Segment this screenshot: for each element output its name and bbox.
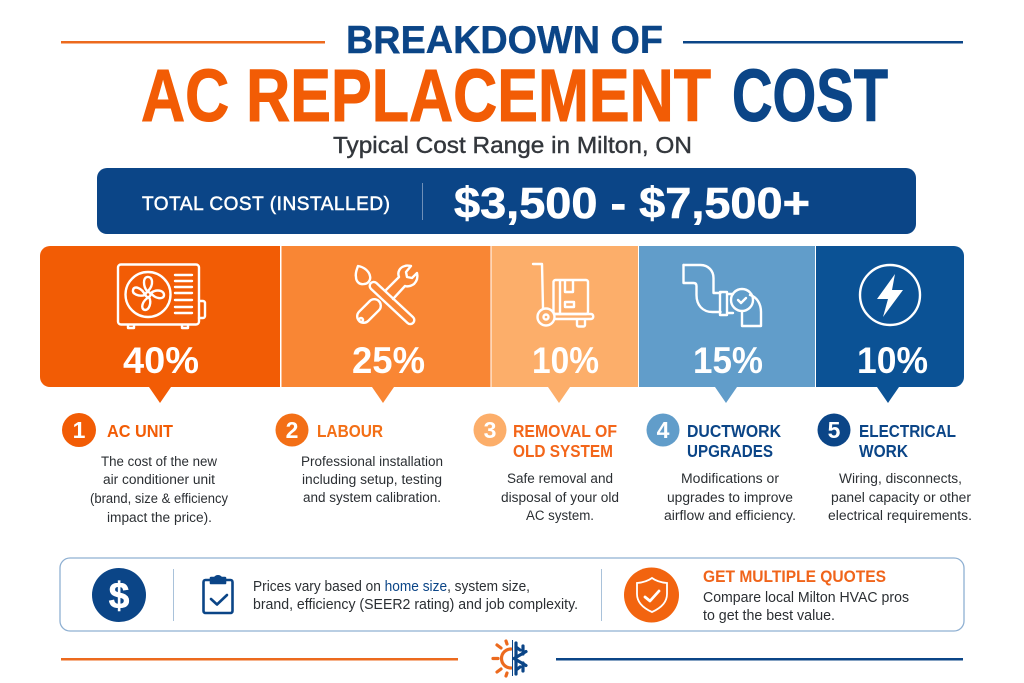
segment: labour 25% — [282, 246, 490, 403]
segment: labour 25%: 25% — [352, 340, 425, 381]
icon: clipboard check — [204, 576, 232, 613]
callout: get multiple quotes: to get the best value. — [703, 608, 835, 624]
item 5: electrical work: WORK — [859, 441, 908, 461]
item 5: electrical work: ELECTRICAL — [859, 421, 956, 441]
item 1: AC unit: The cost of the new — [101, 454, 217, 469]
total cost banner: $3,500 - $7,500+ — [454, 179, 810, 228]
item 4: ductwork upgrades: 4 — [657, 417, 670, 443]
item 1: AC unit — [62, 413, 228, 525]
title: COST — [732, 54, 888, 137]
icon: duct pipe with gauge — [684, 265, 761, 326]
item 4: ductwork upgrades — [646, 414, 796, 523]
panel: notes box — [60, 558, 964, 631]
segment: electrical 10%: 10% — [857, 340, 928, 381]
item 2: labour: and system calibration. — [303, 490, 441, 505]
item 4: ductwork upgrades: upgrades to improve — [667, 490, 793, 505]
icon: outdoor AC unit — [118, 264, 205, 328]
title — [141, 19, 888, 137]
item 5: electrical work: Wiring, disconnects, — [839, 471, 962, 486]
item 2: labour: including setup, testing — [302, 472, 442, 487]
total cost banner: TOTAL COST (INSTALLED) — [142, 194, 390, 215]
total cost banner — [97, 168, 916, 234]
item 5: electrical work: panel capacity or other — [831, 490, 972, 505]
icon: lightning bolt in circle — [860, 265, 920, 325]
title: AC REPLACEMENT — [141, 54, 711, 137]
item 2: labour: 2 — [286, 417, 298, 443]
item 2: labour — [276, 414, 443, 505]
item 4: ductwork upgrades: UPGRADES — [687, 441, 773, 461]
item 5: electrical work: electrical requirements. — [828, 508, 972, 523]
segment: electrical 10% — [816, 246, 964, 403]
note: price factors: brand, efficiency (SEER2 rating) and job complexity. — [253, 597, 578, 613]
item 5: electrical work: 5 — [828, 417, 841, 443]
segment: ductwork 15%: 15% — [693, 340, 763, 381]
item 3: removal of old system: Safe removal and — [507, 471, 613, 486]
item 3: removal of old system: OLD SYSTEM — [513, 441, 613, 461]
item 3: removal of old system: 3 — [484, 417, 496, 443]
item 4: ductwork upgrades: airflow and efficiency. — [664, 508, 796, 523]
item 4: ductwork upgrades: Modifications or — [681, 471, 780, 486]
item 3: removal of old system: disposal of your old — [501, 490, 619, 505]
icon: dollar — [92, 568, 146, 622]
item 1: AC unit: (brand, size & efficiency — [90, 491, 228, 506]
icon: hand truck with box — [533, 264, 593, 326]
segment: ductwork 15% — [639, 246, 815, 403]
segment: AC unit 40%: 40% — [123, 340, 199, 381]
panel: cost percentage bar — [40, 246, 964, 403]
icon: shield check — [624, 568, 679, 622]
item 2: labour: Professional installation — [301, 454, 443, 469]
item 3: removal of old system: REMOVAL OF — [513, 421, 617, 441]
item 1: AC unit: 1 — [73, 417, 86, 443]
title: BREAKDOWN OF — [346, 19, 663, 62]
callout: get multiple quotes: GET MULTIPLE QUOTES — [703, 568, 886, 586]
item 3: removal of old system: AC system. — [526, 508, 594, 523]
icon: dollar: $ — [109, 575, 130, 616]
item 1: AC unit: AC UNIT — [107, 421, 173, 441]
callout: get multiple quotes — [703, 568, 909, 624]
icon: sun and snowflake logo — [493, 640, 526, 676]
note: price factors: Prices vary based on home size, system size, — [253, 579, 530, 595]
icon: brush and wrench — [355, 266, 417, 326]
item 1: AC unit: air conditioner unit — [103, 472, 215, 487]
segment: AC unit 40% — [40, 246, 280, 403]
item 2: labour: LABOUR — [317, 421, 383, 441]
callout: get multiple quotes: Compare local Milton HVAC pros — [703, 590, 909, 606]
item 1: AC unit: impact the price). — [107, 510, 212, 525]
item 5: electrical work — [818, 414, 972, 523]
item 4: ductwork upgrades: DUCTWORK — [687, 421, 781, 441]
item 3: removal of old system — [474, 414, 619, 523]
segment: removal 10% — [492, 246, 638, 403]
note: price factors — [253, 579, 578, 613]
segment: removal 10%: 10% — [532, 340, 599, 381]
subtitle: Typical Cost Range in Milton, ON — [333, 132, 692, 158]
